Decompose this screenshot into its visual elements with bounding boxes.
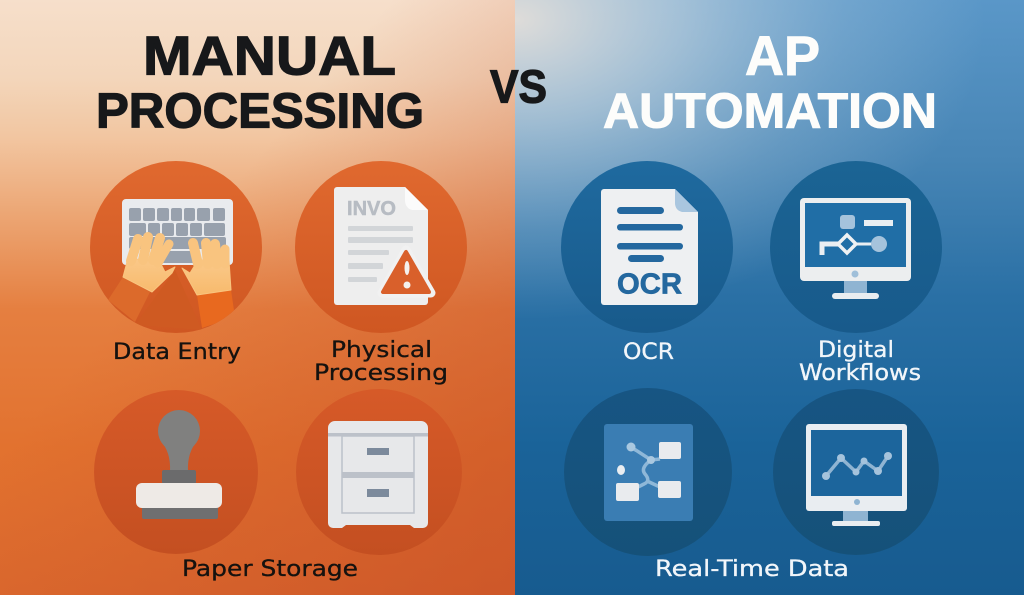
item: filing cabinet	[296, 389, 462, 555]
label: ocr: OCR	[623, 340, 674, 365]
label: physical processing: Physical	[331, 338, 432, 363]
item: data entry	[90, 161, 262, 365]
icon: workflow monitor	[800, 198, 911, 299]
item: stamp	[94, 390, 258, 554]
icon: left hand	[123, 237, 175, 292]
item: network diagram	[564, 388, 732, 556]
icon: network diagram	[604, 424, 693, 521]
vs label: VS	[490, 60, 547, 112]
label: digital workflows	[799, 338, 921, 386]
label: digital workflows: Digital	[818, 338, 894, 363]
icon: filing cabinet	[328, 421, 428, 528]
title: manual processing	[96, 24, 424, 138]
title: ap automation	[603, 24, 937, 138]
icon: line chart monitor	[806, 424, 907, 526]
title: manual processing: PROCESSING	[96, 84, 424, 138]
icon: rubber stamp	[136, 410, 222, 519]
left panel: manual processing	[0, 0, 516, 595]
label: physical processing	[314, 338, 448, 386]
item: physical processing	[295, 161, 467, 386]
right panel: ap automation	[515, 0, 1024, 595]
title: ap automation: AP	[745, 24, 820, 87]
icon: ocr document	[601, 189, 698, 305]
item: ocr	[561, 161, 733, 365]
item: digital workflows	[770, 161, 942, 386]
icon: ocr document: OCR	[617, 268, 682, 300]
label: paper storage: Paper Storage	[182, 557, 358, 582]
title: manual processing: MANUAL	[143, 24, 396, 86]
icon: keyboard	[122, 199, 233, 265]
icon: sleeves	[108, 278, 234, 328]
label: real-time data: Real-Time Data	[655, 557, 849, 582]
label: data entry: Data Entry	[113, 340, 241, 365]
label: physical processing: Processing	[314, 361, 448, 386]
label: digital workflows: Workflows	[799, 361, 921, 386]
icon: invoice with warning	[334, 187, 431, 305]
icon: right hand	[182, 243, 231, 295]
item: chart monitor	[773, 389, 939, 555]
title: ap automation: AUTOMATION	[603, 84, 937, 138]
icon: invoice with warning: INVO	[347, 198, 396, 220]
